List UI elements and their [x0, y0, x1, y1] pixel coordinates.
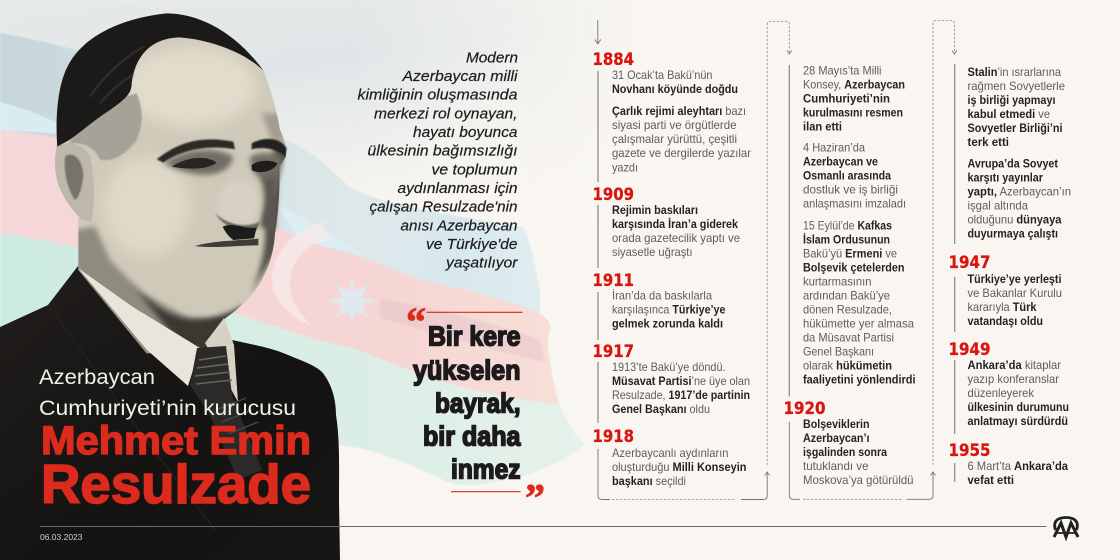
- portrait: right eye: [252, 161, 277, 172]
- 1918 continued: Bakü’yü Ermeni ve: [803, 248, 897, 260]
- 1918 continued: Bolşevik çetelerden: [803, 262, 904, 274]
- year 1884: yazdı: [612, 162, 638, 174]
- year 1918: [592, 427, 746, 488]
- 1920 continued: iş birliği yapmayı: [968, 94, 1056, 107]
- year 1949: 1949: [948, 340, 990, 360]
- year 1911: [592, 271, 726, 330]
- year 1917: Müsavat Partisi’ne üye olan: [612, 375, 750, 388]
- portrait: left eye: [172, 158, 217, 169]
- quote rule bottom: [451, 491, 520, 493]
- portrait: ear: [55, 143, 94, 221]
- quote rule top: [426, 311, 522, 313]
- year 1917: Resulzade, 1917’de partinin: [612, 389, 750, 402]
- 1918 continued: 15 Eylül’de Kafkas: [803, 220, 892, 232]
- year 1920: Azerbaycan’ı: [803, 432, 870, 445]
- 1918 continued: kurtarmasının: [803, 276, 872, 288]
- portrait: head and neck: [50, 10, 290, 357]
- 1918 continued: Osmanlı arasında: [803, 170, 892, 182]
- year 1917: 1917: [592, 342, 634, 362]
- 1920 continued: kabul etmedi ve: [968, 108, 1050, 121]
- portrait: nostril shadow: [215, 213, 260, 231]
- portrait: mouth: [195, 239, 258, 247]
- year 1920: Bolşeviklerin: [803, 418, 870, 431]
- quote text: bayrak,: [435, 388, 520, 418]
- 1920 continued: karşıtı yayınlar: [968, 172, 1043, 184]
- quote text: [413, 320, 521, 484]
- year 1920: işgalinden sonra: [803, 446, 887, 459]
- year 1949: anlatmayı sürdürdü: [968, 415, 1068, 428]
- year 1920: 1920: [784, 399, 826, 419]
- subtitle: Azerbaycan Cumhuriyeti'nin kurucusu: Azerbaycan: [39, 366, 155, 389]
- 1920 continued: duyurmaya çalıştı: [968, 228, 1058, 240]
- title: Mehmet Emin Resulzade: [41, 419, 311, 515]
- 1920 continued: [968, 66, 1071, 240]
- portrait: nose-side shadow: [259, 177, 277, 230]
- year 1911: karşılaşınca Türkiye’ye: [612, 304, 726, 316]
- year 1884: gazete ve dergilerde yazılar: [612, 147, 751, 160]
- year 1955: [948, 441, 1069, 487]
- 1918 continued: hükümette yer almasa: [803, 318, 915, 330]
- 1918 continued: İslam Ordusunun: [803, 234, 890, 246]
- 1918 continued: ardından Bakü’ye: [803, 290, 890, 302]
- timeline connectors and arrows: [595, 20, 957, 500]
- year 1918: başkanı seçildi: [612, 475, 686, 488]
- year 1955: 6 Mart’ta Ankara’da: [968, 460, 1069, 473]
- quote block: [406, 299, 545, 520]
- year 1909: orada gazetecilik yaptı ve: [612, 232, 740, 245]
- year 1884: Çarlık rejimi aleyhtarı bazı: [612, 105, 746, 118]
- year 1884: çalışmalar yürüttü, çeşitli: [612, 133, 737, 146]
- 1920 continued: işgal altında: [968, 200, 1029, 212]
- year 1917: [592, 342, 750, 416]
- year 1884: siyasi parti ve örgütlerde: [612, 119, 736, 132]
- year 1909: siyasetle uğraştı: [612, 246, 692, 259]
- year 1918: 1918: [592, 427, 634, 447]
- timeline column 2: [784, 64, 916, 487]
- quote text: bir daha: [423, 420, 521, 452]
- 1918 continued: Cumhuriyeti’nin: [803, 92, 890, 106]
- 1918 continued: 28 Mayıs’ta Milli: [803, 64, 882, 78]
- 1920 continued: olduğunu dünyaya: [968, 214, 1062, 226]
- 1918 continued: olarak hükümetin: [803, 360, 892, 372]
- 1918 continued: kurulmasını resmen: [803, 106, 903, 120]
- subtitle: Azerbaycan Cumhuriyeti'nin kurucusu: Cumhuriyeti’nin kurucusu: [39, 397, 296, 420]
- portrait: moustache: [223, 225, 257, 240]
- intro text block: [358, 50, 519, 272]
- icon: AA logo: [1054, 518, 1078, 537]
- year 1949: ülkesinin durumunu: [968, 401, 1069, 414]
- 1918 continued: 4 Haziran’da: [803, 142, 866, 154]
- year 1909: Rejimin baskıları: [612, 204, 698, 217]
- intro text block: Azerbaycan milli: [401, 69, 518, 85]
- quote text: inmez: [451, 454, 520, 484]
- 1920 continued: terk etti: [968, 136, 1009, 149]
- 1918 continued: ilan etti: [803, 120, 842, 134]
- date: 06.03.2023: [40, 532, 83, 542]
- title: Mehmet Emin Resulzade: Mehmet Emin: [41, 419, 311, 463]
- 1920 continued: yaptı, Azerbaycan’ın: [968, 186, 1071, 198]
- portrait: left eyebrow: [157, 139, 235, 163]
- background: waving Azerbaijan flag: [0, 0, 640, 485]
- title: Mehmet Emin Resulzade: Resulzade: [41, 453, 311, 515]
- 1918 continued: da Müsavat Partisi: [803, 332, 894, 344]
- year 1917: Genel Başkanı oldu: [612, 403, 710, 416]
- 1918 continued: [803, 64, 916, 386]
- portrait: eye sockets: [163, 150, 283, 181]
- year 1949: [948, 340, 1069, 428]
- 1918 continued: faaliyetini yönlendirdi: [803, 374, 916, 386]
- year 1911: İran’da da baskılarla: [612, 290, 713, 302]
- portrait: hair: [57, 13, 263, 147]
- intro text block: anısı Azerbaycan: [400, 218, 518, 234]
- 1918 continued: dostluk ve iş birliği: [803, 184, 898, 196]
- intro text block: yaşatılıyor: [445, 256, 519, 272]
- 1920 continued: Stalin’in ısrarlarına: [968, 66, 1062, 79]
- year 1884: 31 Ocak’ta Bakü’nün: [612, 69, 712, 82]
- year 1909: [592, 185, 740, 259]
- year 1947: ve Bakanlar Kurulu: [968, 287, 1062, 300]
- year 1918: oluşturduğu Milli Konseyin: [612, 461, 746, 474]
- year 1911: gelmek zorunda kaldı: [612, 318, 723, 330]
- year 1911: 1911: [592, 271, 634, 291]
- year 1920: [784, 399, 914, 487]
- intro text block: aydınlanması için: [398, 181, 518, 197]
- year 1909: karşısında İran’a giderek: [612, 218, 738, 231]
- portrait: shirt collar and tie: [48, 268, 262, 530]
- portrait of Mehmet Emin Resulzade: [0, 10, 340, 560]
- 1918 continued: Genel Başkanı: [803, 346, 874, 358]
- intro text block: hayatı boyunca: [413, 125, 518, 141]
- icon: closing quote mark: ”: [525, 476, 545, 520]
- portrait: suit: [0, 266, 340, 560]
- intro text block: ve Türkiye'de: [426, 237, 518, 253]
- intro text block: ve toplumun: [432, 162, 518, 178]
- 1918 continued: Konsey, Azerbaycan: [803, 78, 905, 92]
- year 1909: 1909: [592, 185, 634, 205]
- 1918 continued: anlaşmasını imzaladı: [803, 198, 906, 210]
- 1918 continued: Azerbaycan ve: [803, 156, 879, 168]
- intro text block: Modern: [466, 50, 518, 66]
- year 1884: Novhanı köyünde doğdu: [612, 83, 738, 96]
- intro text block: ülkesinin bağımsızlığı: [368, 144, 518, 160]
- 1918 continued: dönen Resulzade,: [803, 304, 892, 316]
- year 1947: vatandaşı oldu: [968, 315, 1043, 328]
- year 1917: 1913’te Bakü’ye döndü.: [612, 361, 726, 374]
- timeline column 1: [592, 50, 751, 488]
- 1920 continued: Sovyetler Birliği’ni: [968, 122, 1062, 135]
- year 1884: 1884: [592, 50, 634, 70]
- icon: opening quote mark: “: [406, 299, 426, 344]
- year 1920: tutuklandı ve: [803, 460, 868, 473]
- portrait: inner ear: [65, 155, 83, 200]
- intro text block: kimliğinin oluşmasında: [358, 88, 518, 104]
- year 1947: 1947: [948, 253, 990, 273]
- year 1955: vefat etti: [968, 474, 1014, 487]
- portrait: nose: [218, 180, 258, 227]
- year 1949: Ankara’da kitaplar: [968, 359, 1061, 372]
- year 1949: düzenleyerek: [968, 387, 1034, 400]
- timeline column 3: [948, 66, 1071, 487]
- 1920 continued: rağmen Sovyetlerle: [968, 80, 1065, 93]
- year 1884: [592, 50, 751, 174]
- bottom rule: [40, 526, 1046, 528]
- year 1920: Moskova’ya götürüldü: [803, 474, 914, 487]
- subtitle: Azerbaycan Cumhuriyeti'nin kurucusu: [39, 366, 296, 420]
- year 1947: Türkiye’ye yerleşti: [968, 273, 1062, 286]
- intro text block: çalışan Resulzade'nin: [370, 200, 518, 216]
- intro text block: merkezi rol oynayan,: [374, 106, 518, 122]
- portrait: grey temple hair: [68, 93, 142, 160]
- year 1955: 1955: [948, 441, 990, 461]
- quote text: yükselen: [413, 354, 520, 386]
- portrait: right eyebrow: [252, 139, 287, 156]
- 1920 continued: Avrupa’da Sovyet: [968, 158, 1058, 170]
- portrait: hair highlights: [90, 47, 143, 103]
- year 1947: kararıyla Türk: [968, 301, 1037, 314]
- year 1918: Azerbaycanlı aydınların: [612, 447, 728, 460]
- year 1949: yazıp konferanslar: [968, 373, 1059, 386]
- year 1947: [948, 253, 1062, 328]
- quote text: Bir kere: [428, 320, 520, 352]
